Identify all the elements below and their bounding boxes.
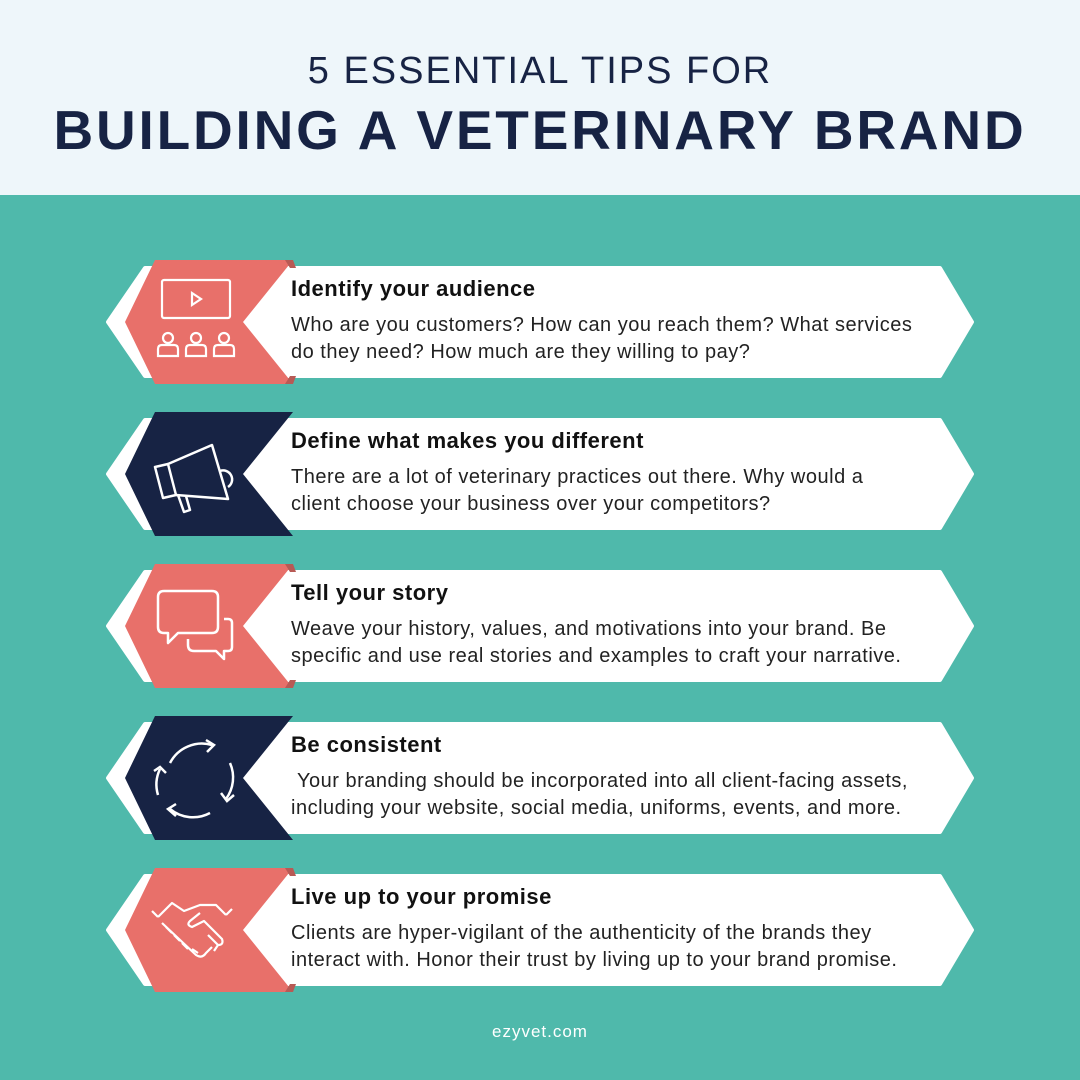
tip 4 heading: Be consistent: [291, 732, 442, 757]
icon: audience: [158, 280, 234, 356]
tip 3 heading: Tell your story: [291, 580, 448, 605]
tip 1 text: Who are you customers? How can you reach them? What services do they need? How much are they willing to pay?: [291, 314, 912, 363]
tip 4 panel: [106, 716, 974, 840]
tip 5 panel: [106, 868, 974, 992]
tip 3 panel: [106, 564, 974, 688]
tip 2 panel: [106, 412, 974, 536]
tip 2 heading: Define what makes you different: [291, 428, 644, 453]
icon: cycle arrows: [154, 740, 234, 817]
tip 3 text: Weave your history, values, and motivations into your brand. Be specific and use real stories and examples to craft your narrative.: [291, 618, 901, 667]
tip 5 heading: Live up to your promise: [291, 884, 552, 909]
title line 1: 5 ESSENTIAL TIPS FOR: [308, 50, 772, 92]
footer url: ezyvet.com: [492, 1022, 588, 1041]
title line 2: BUILDING A VETERINARY BRAND: [54, 99, 1026, 161]
tip 5 text: Clients are hyper-vigilant of the authenticity of the brands they interact with. Honor their trust by living up to your brand promise.: [291, 922, 897, 971]
icon: speech bubbles: [158, 591, 232, 659]
icon: handshake: [152, 903, 232, 957]
header: [0, 0, 1080, 195]
tip 1 panel: [106, 260, 974, 384]
tip 2 text: There are a lot of veterinary practices out there. Why would a client choose your business over your competitors?: [291, 466, 863, 515]
icon: megaphone: [155, 445, 232, 512]
tip 1 heading: Identify your audience: [291, 276, 536, 301]
tip 4 text: Your branding should be incorporated into all client-facing assets, including your website, social media, uniforms, events, and more.: [291, 770, 908, 819]
